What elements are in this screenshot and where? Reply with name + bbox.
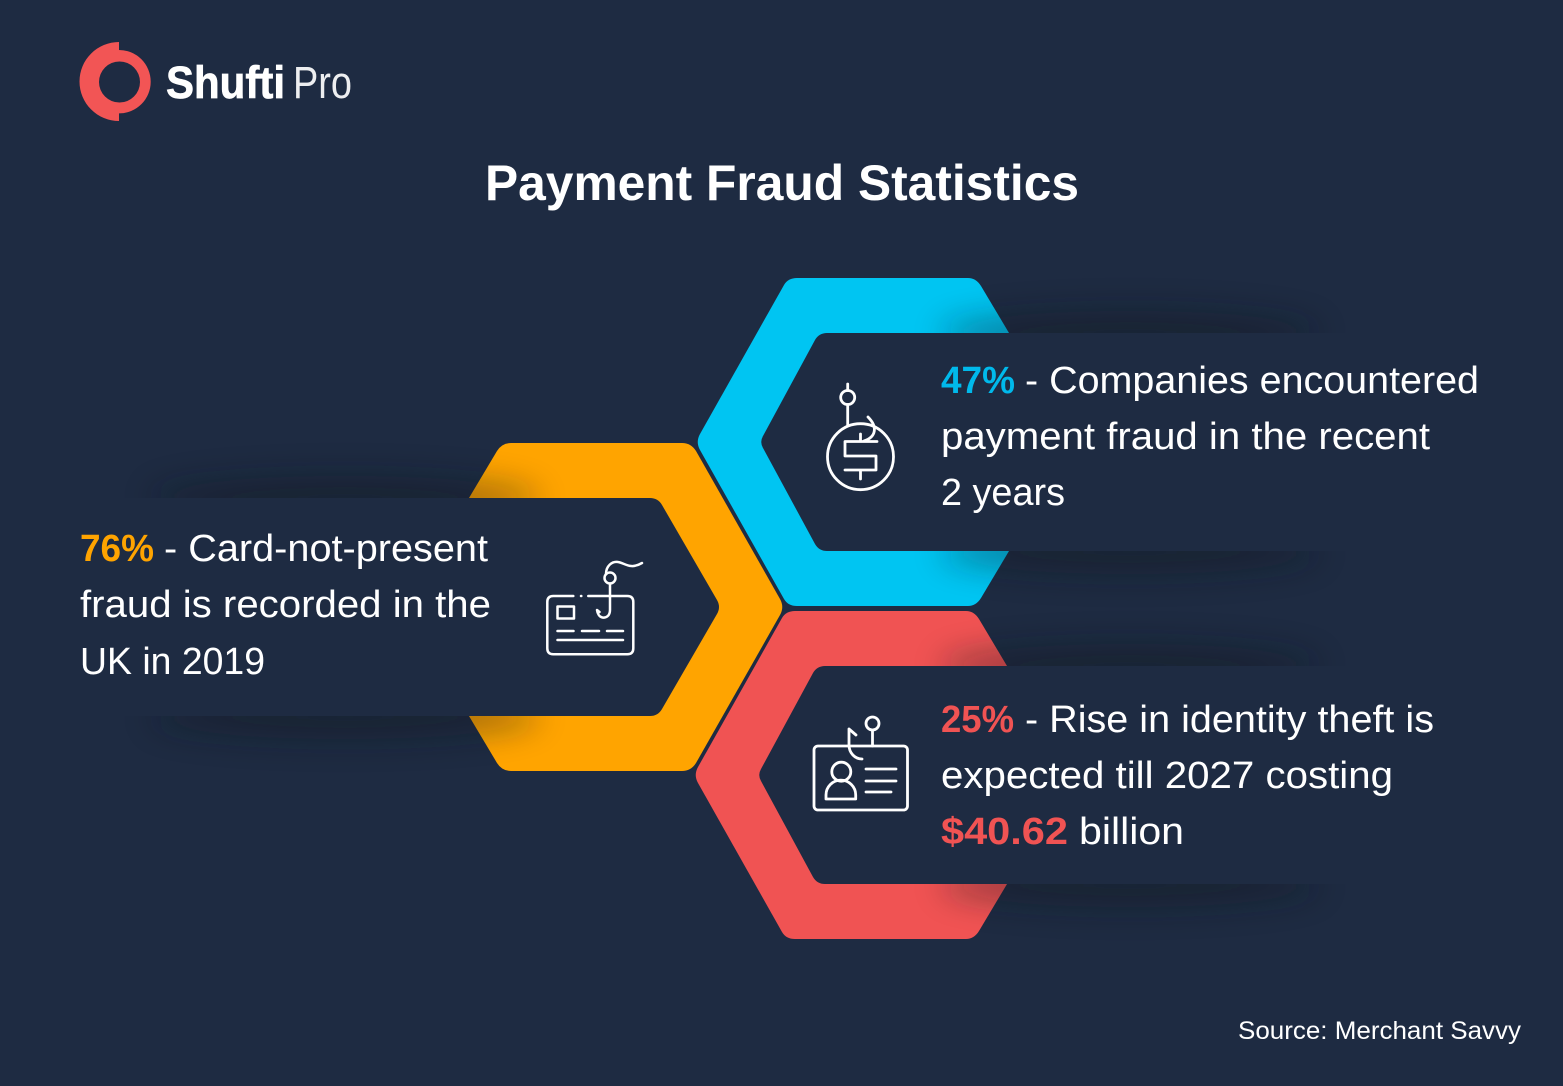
red hexagon ring [696, 611, 1010, 939]
icon: dollar on hook [828, 384, 894, 490]
panel: 76% card-not-present (orange) [0, 443, 782, 771]
panel: 25% identity theft (red) [696, 611, 1563, 939]
text: 25%: expected till 2027 costing [941, 755, 1393, 797]
text: 76%: - Card-not-present [164, 528, 488, 570]
blue hexagon ring [698, 278, 1012, 606]
icon: card on hook [547, 562, 642, 654]
orange hexagon ring [466, 443, 782, 771]
orange panel body [0, 498, 719, 716]
text: 76%: UK in 2019 [80, 641, 265, 683]
text: 47%: payment fraud in the recent [941, 416, 1430, 458]
text: 76% [80, 528, 491, 683]
logo [80, 42, 352, 121]
text: 47%: 2 years [941, 472, 1065, 514]
logo wordmark [166, 57, 352, 108]
title: Payment Fraud Statistics [485, 155, 1079, 211]
text: 25%: billion [1079, 811, 1184, 853]
text: 47%: 47% [941, 360, 1015, 402]
logo mark [80, 42, 151, 121]
logo wordmark: Pro [293, 57, 352, 108]
text: 25%: - Rise in identity theft is [1025, 699, 1434, 741]
shadow around blue panel [940, 311, 1320, 574]
red panel body [759, 666, 1563, 884]
panel: 47% companies (blue) [698, 278, 1563, 606]
text: 47% [941, 360, 1479, 514]
text: 25%: 25% [941, 699, 1014, 741]
shadow around red panel [940, 644, 1320, 907]
text: 76%: fraud is recorded in the [80, 584, 491, 626]
shadow around orange panel [150, 476, 540, 739]
logo wordmark: Shufti [166, 57, 285, 108]
source note: Source: Merchant Savvy [1238, 1017, 1522, 1045]
text: 25%: $40.62 [941, 811, 1068, 853]
blue panel body [761, 333, 1563, 551]
text: 47%: - Companies encountered [1025, 360, 1479, 402]
text: 25% [941, 699, 1434, 853]
icon: ID card on hook [814, 717, 908, 810]
text: 76%: 76% [80, 528, 154, 570]
